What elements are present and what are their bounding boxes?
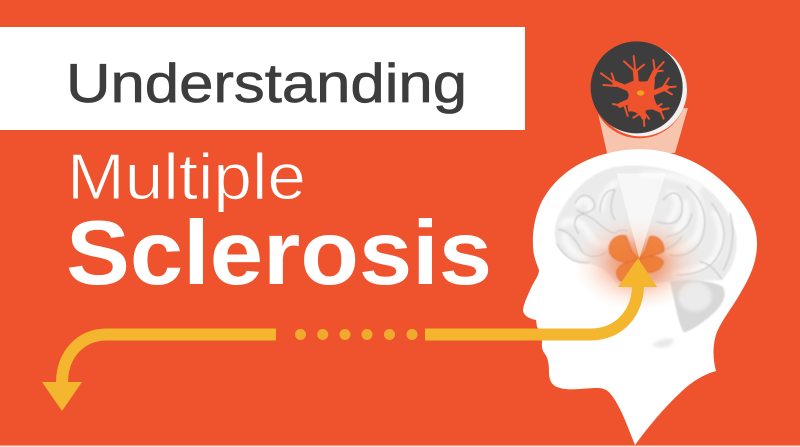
heading box: Understanding <box>0 27 525 130</box>
head silhouette with brain <box>523 149 757 445</box>
neuron lens <box>591 41 687 138</box>
cerebrum mass <box>555 165 737 286</box>
dotted connector <box>295 329 418 340</box>
title line: Sclerosis: Sclerosis <box>66 203 492 304</box>
brain <box>555 165 737 347</box>
lens rim <box>592 44 686 138</box>
glow behind the lesion <box>573 215 703 312</box>
neuron cell <box>601 56 676 126</box>
nucleus <box>637 90 644 96</box>
beam inside brain <box>617 173 666 258</box>
title line: Multiple: Multiple <box>67 140 306 213</box>
throat shading <box>652 338 675 347</box>
white gyri <box>563 174 720 273</box>
heading box: Understanding: Understanding <box>66 52 467 114</box>
arrow: left segment pointing down <box>42 334 276 411</box>
light beam from neuron lens to head <box>598 108 688 153</box>
arrow: right segment pointing to the brain <box>425 258 657 334</box>
head outline <box>523 149 757 445</box>
cerebellum <box>670 280 725 333</box>
brain folds <box>557 187 733 279</box>
lens disc <box>591 41 683 133</box>
orange lobes <box>609 236 664 282</box>
